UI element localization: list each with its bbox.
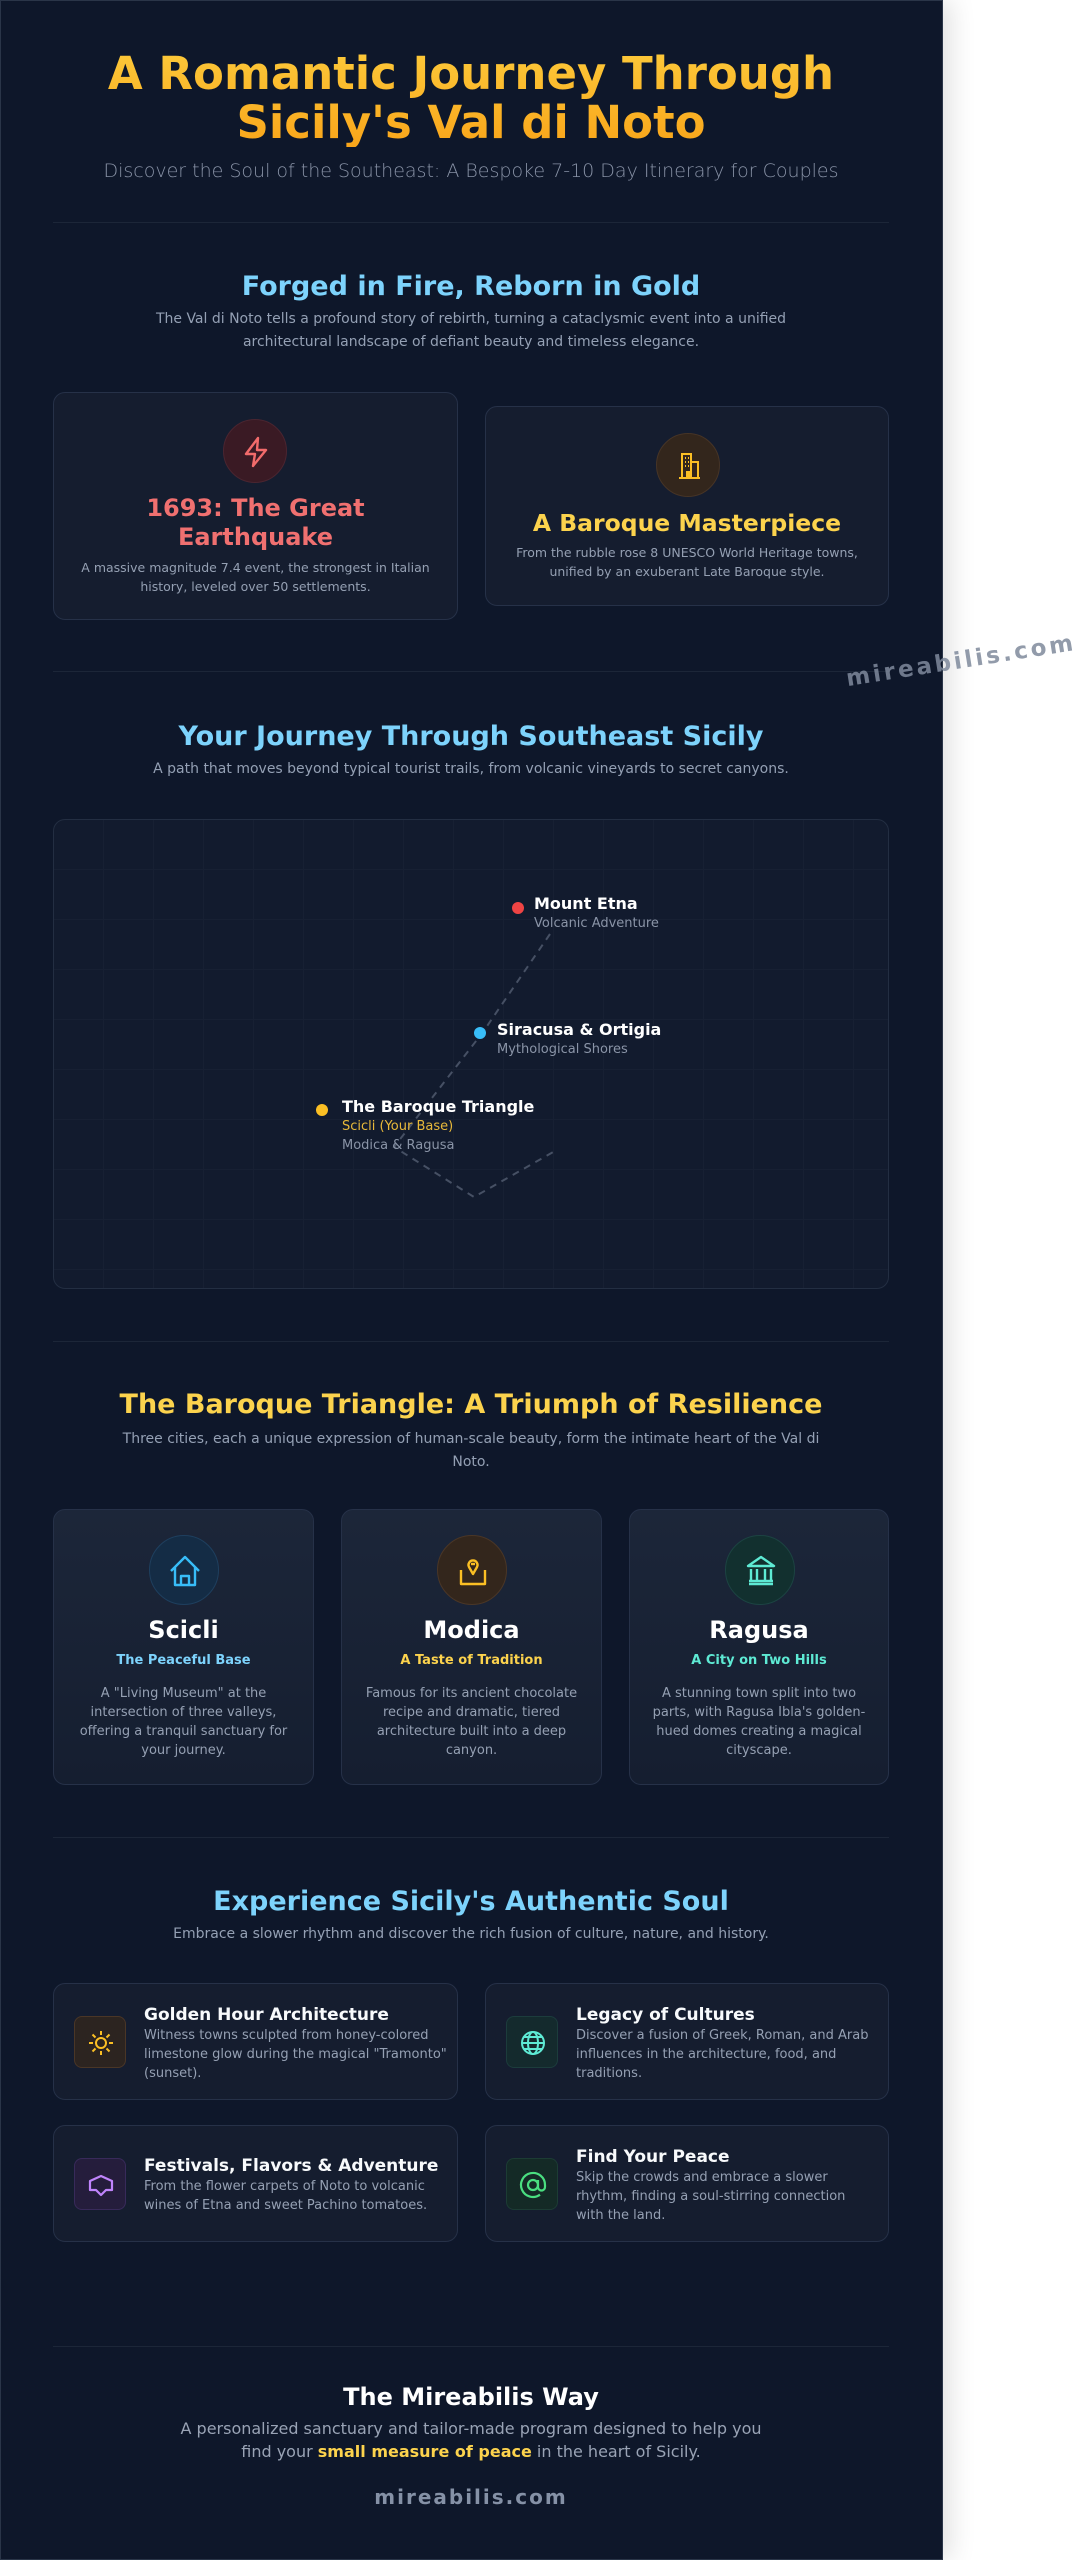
city text: Famous for its ancient chocolate recipe and dramatic, tiered architecture built into a deep canyon. <box>366 1686 577 1758</box>
feature text <box>144 2156 438 2213</box>
icon: buildings <box>656 433 720 497</box>
subtitle: Discover the Soul of the Southeast: A Bespoke 7-10 Day Itinerary for Couples <box>103 160 838 182</box>
map <box>53 819 889 1289</box>
feature text <box>576 2005 868 2081</box>
marker: etna: Volcanic Adventure <box>534 916 659 931</box>
feature text: Witness towns sculpted from honey-colored limestone glow during the magical "Tramonto" (sunset). <box>144 2028 447 2081</box>
text: footer <box>180 2419 762 2461</box>
feature text: Legacy of Cultures <box>576 2005 755 2025</box>
icon: sun <box>74 2016 126 2068</box>
watermark: mireabilis.com <box>844 630 1074 692</box>
card title <box>146 494 365 551</box>
marker: baroque triangle: Scicli (Your Base) <box>342 1119 453 1134</box>
panel: golden hour <box>53 1983 458 2100</box>
city text: A "Living Museum" at the intersection of three valleys, offering a tranquil sanctuary for your journey. <box>80 1686 287 1758</box>
panel: modica <box>341 1509 602 1785</box>
icon: house <box>149 1535 219 1605</box>
heading: mireabilis way: The Mireabilis Way <box>343 2383 599 2411</box>
marker: etna: Mount Etna <box>534 894 638 913</box>
city name: Ragusa <box>709 1616 809 1644</box>
feature text: Discover a fusion of Greek, Roman, and Arab influences in the architecture, food, and traditions. <box>576 2028 868 2081</box>
marker: siracusa: Mythological Shores <box>497 1042 628 1057</box>
title: A Romantic Journey Through <box>108 47 834 100</box>
feature text: From the flower carpets of Noto to volcanic wines of Etna and sweet Pachino tomatoes. <box>144 2179 427 2213</box>
city tag: A City on Two Hills <box>691 1653 827 1668</box>
text: footer: find your small measure of peace in the heart of Sicily. <box>241 2442 701 2461</box>
feature text: Golden Hour Architecture <box>144 2005 389 2025</box>
text: footer: A personalized sanctuary and tailor-made program designed to help you <box>180 2419 762 2438</box>
heading: journey: Your Journey Through Southeast Sicily <box>178 721 763 752</box>
feature text <box>576 2147 845 2223</box>
city tag: The Peaceful Base <box>116 1653 251 1668</box>
city tag: A Taste of Tradition <box>400 1653 543 1668</box>
text: journey intro: A path that moves beyond typical tourist trails, from volcanic vineyards to secret canyons. <box>153 761 789 777</box>
card title: 1693: The Great <box>146 494 365 522</box>
marker: siracusa: Siracusa & Ortigia <box>497 1020 661 1039</box>
heading: baroque triangle: The Baroque Triangle: A Triumph of Resilience <box>120 1389 822 1420</box>
card text: A massive magnitude 7.4 event, the strongest in Italian history, leveled over 50 settlements. <box>81 560 430 594</box>
text: triangle intro: Three cities, each a unique expression of human-scale beauty, form the intimate heart of the Val di Noto. <box>123 1431 819 1470</box>
panel: find your peace <box>485 2125 889 2242</box>
panel: earthquake card <box>53 392 458 620</box>
marker: baroque triangle: Modica & Ragusa <box>342 1138 454 1153</box>
icon: mask <box>74 2158 126 2210</box>
heading: forged in fire: Forged in Fire, Reborn in Gold <box>242 271 700 302</box>
card text: From the rubble rose 8 UNESCO World Heritage towns, unified by an exuberant Late Baroque style. <box>516 545 858 579</box>
icon: globe <box>506 2016 558 2068</box>
title: Sicily's Val di Noto <box>236 96 706 149</box>
text: forged intro: The Val di Noto tells a profound story of rebirth, turning a cataclysmic event into a unified architectural landscape of defiant beauty and timeless elegance. <box>156 311 786 350</box>
icon: chocolate <box>437 1535 507 1605</box>
feature text: Skip the crowds and embrace a slower rhythm, finding a soul-stirring connection with the land. <box>576 2170 845 2223</box>
card title: A Baroque Masterpiece <box>533 509 841 537</box>
panel: legacy <box>485 1983 889 2100</box>
text: soul intro: Embrace a slower rhythm and discover the rich fusion of culture, nature, and history. <box>173 1926 769 1942</box>
icon: at sign <box>506 2158 558 2210</box>
marker: siracusa <box>474 1020 661 1057</box>
panel: baroque masterpiece card <box>485 406 889 606</box>
city name: Modica <box>423 1616 520 1644</box>
feature text: Find Your Peace <box>576 2147 730 2167</box>
panel: festivals <box>53 2125 458 2242</box>
icon: temple <box>725 1535 795 1605</box>
feature text: Festivals, Flavors & Adventure <box>144 2156 438 2176</box>
city text: A stunning town split into two parts, with Ragusa Ibla's golden-hued domes creating a magical cityscape. <box>653 1686 865 1758</box>
city name: Scicli <box>148 1616 219 1644</box>
icon: lightning <box>223 419 287 483</box>
marker: baroque triangle: The Baroque Triangle <box>342 1097 534 1116</box>
marker: etna <box>512 894 659 931</box>
marker: baroque triangle <box>316 1097 534 1153</box>
panel: ragusa <box>629 1509 889 1785</box>
card title: Earthquake <box>178 523 333 551</box>
route line <box>394 934 555 1197</box>
panel: scicli <box>53 1509 314 1785</box>
footer url: mireabilis.com <box>374 2485 568 2509</box>
feature text <box>144 2005 447 2081</box>
heading: authentic soul: Experience Sicily's Authentic Soul <box>213 1886 729 1917</box>
title <box>53 49 889 147</box>
